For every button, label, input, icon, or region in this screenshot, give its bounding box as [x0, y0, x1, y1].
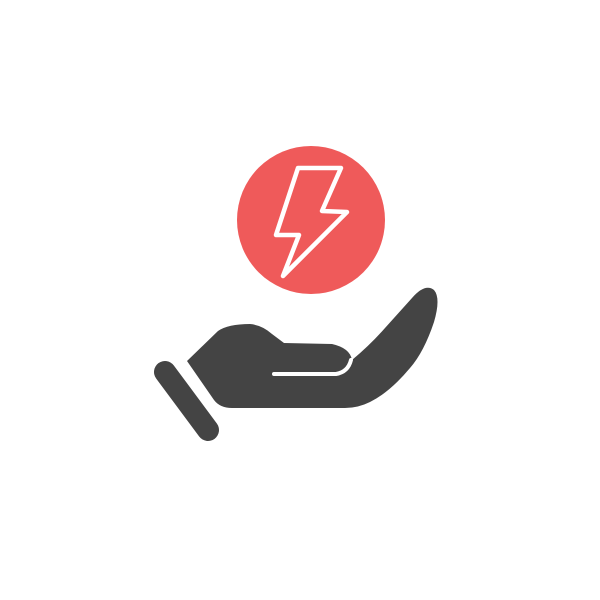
cuff [165, 372, 208, 430]
palm and fingers [187, 288, 438, 408]
icon: hand [165, 288, 438, 430]
icon: energy circle [237, 146, 385, 294]
thumb gap [274, 360, 351, 374]
icon: lightning bolt [276, 168, 347, 276]
